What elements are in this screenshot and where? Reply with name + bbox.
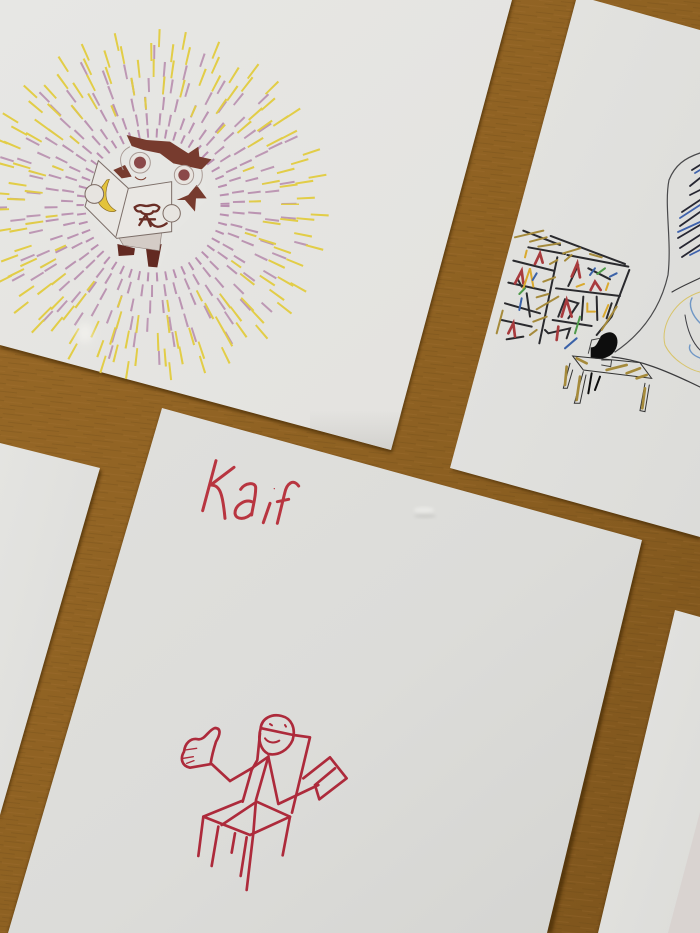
bookshelf and desk drawing xyxy=(497,231,652,412)
paper: left partial sheet xyxy=(0,443,100,815)
paper: bottom-right partial sheet xyxy=(598,610,700,933)
head and face xyxy=(259,715,294,754)
hair xyxy=(127,135,212,169)
glare spot xyxy=(77,323,93,343)
chair xyxy=(203,801,290,835)
head and eyes xyxy=(121,147,202,187)
seated figure xyxy=(592,333,616,358)
gold roof and side strokes xyxy=(497,231,617,335)
open book xyxy=(85,161,172,238)
paper: main sheet with Kaif xyxy=(8,408,642,933)
banana xyxy=(97,179,116,212)
paper crease dent xyxy=(414,507,436,518)
red stick figure on chair xyxy=(182,715,347,890)
radial burst of purple and yellow ticks xyxy=(0,38,320,372)
thought bubble outline with scribbles xyxy=(612,153,700,387)
monkey icon xyxy=(135,205,167,227)
torso xyxy=(243,733,260,802)
hands xyxy=(85,185,104,203)
book xyxy=(303,757,347,799)
character reading a book xyxy=(83,135,212,267)
legs xyxy=(117,244,162,267)
paper: top-left sheet with burst drawing xyxy=(0,0,512,450)
desk xyxy=(563,356,652,412)
coloured books xyxy=(508,253,601,340)
paper: top-right sheet with library drawing xyxy=(450,0,700,537)
thumbs-up hand and arm xyxy=(182,728,230,781)
handwritten name Kaif xyxy=(203,461,299,523)
ink lines xyxy=(502,231,629,343)
edge of another item xyxy=(668,812,700,933)
clear backing behind character xyxy=(83,147,207,267)
